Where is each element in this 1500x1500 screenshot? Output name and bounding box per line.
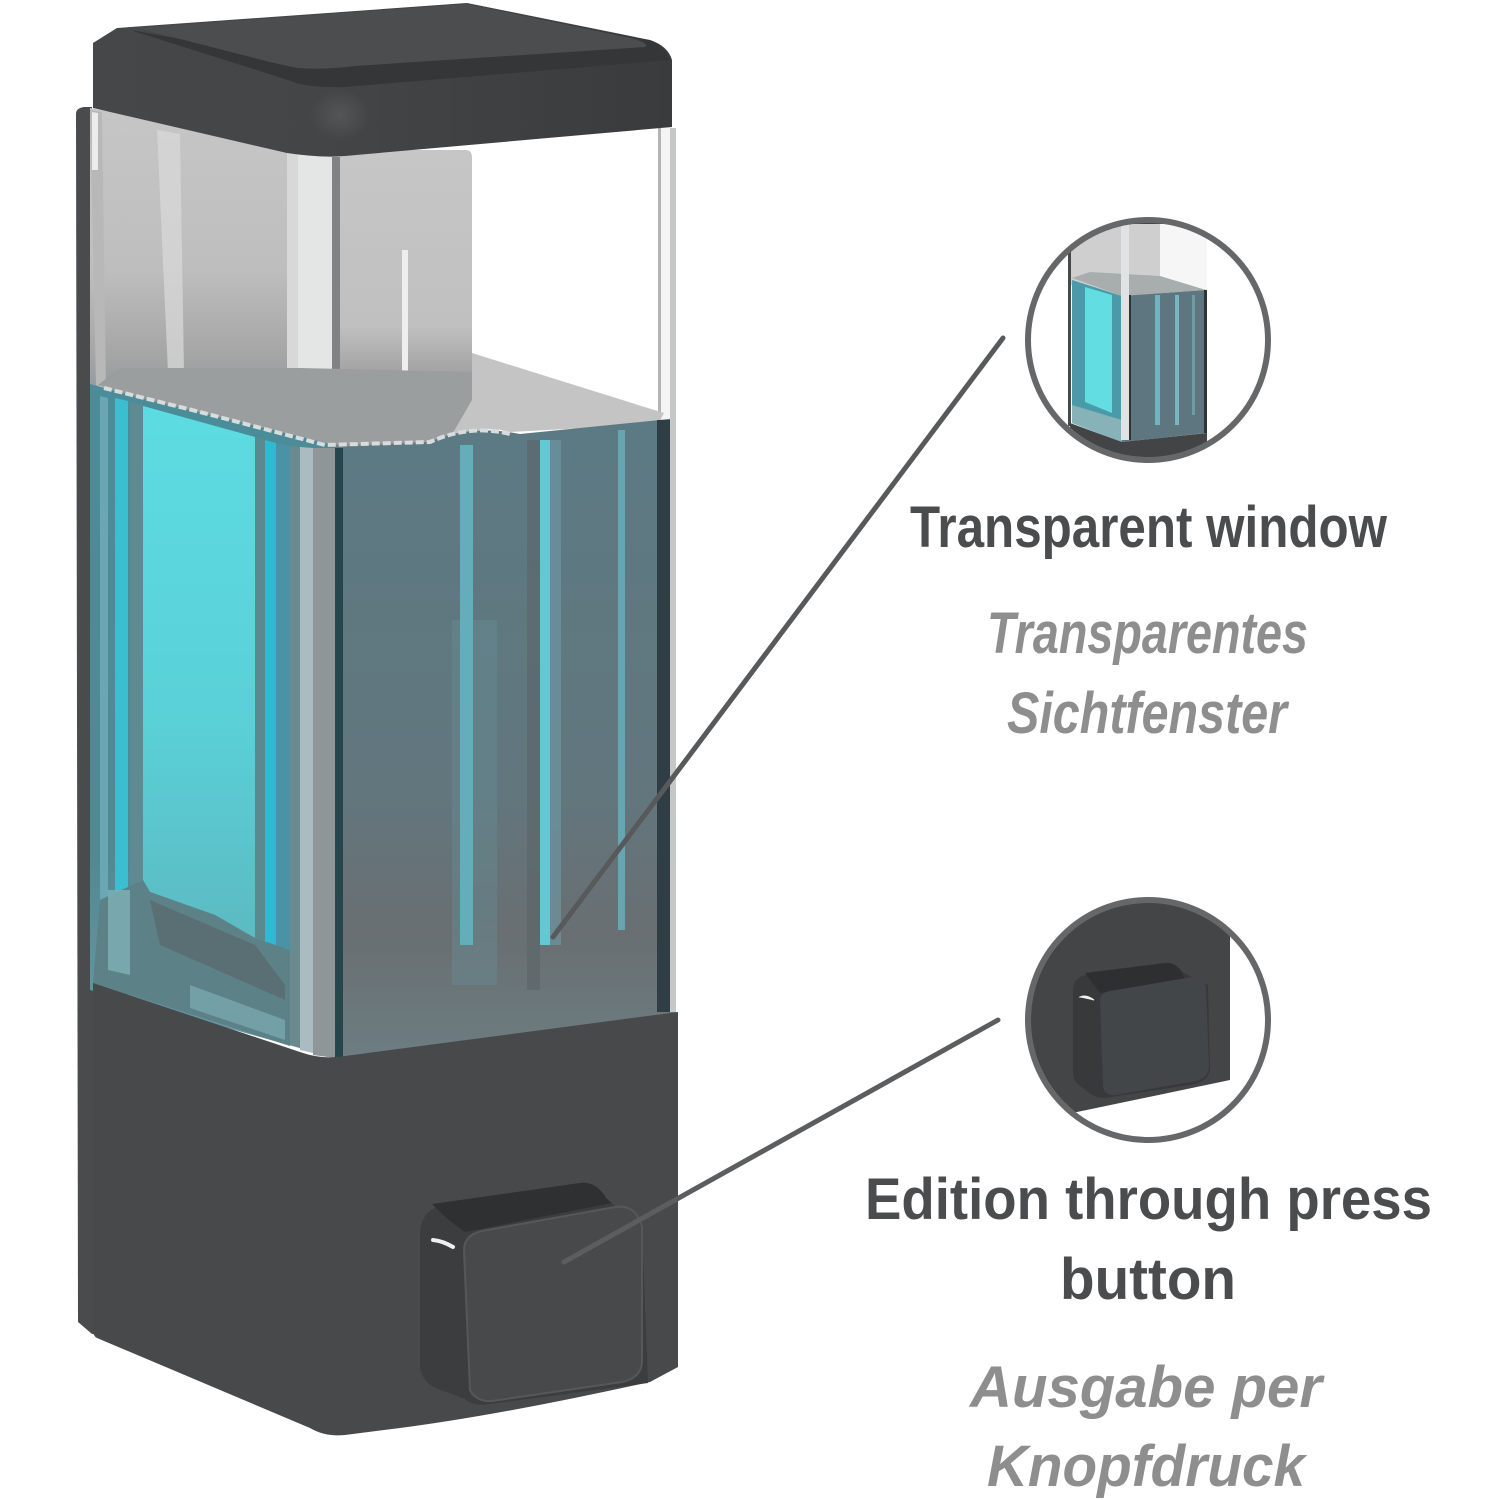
heading: Edition through press: Edition through press bbox=[865, 1167, 1432, 1232]
window: empty upper glass bbox=[90, 106, 674, 470]
liquid: left face bbox=[90, 384, 343, 1060]
body: lower housing bbox=[93, 983, 678, 1435]
refraction streaks bbox=[93, 128, 676, 1058]
heading: button: button bbox=[1060, 1247, 1236, 1312]
button bbox=[420, 1183, 648, 1405]
subheading: Ausgabe per: Ausgabe per bbox=[968, 1355, 1325, 1420]
callout circle: transparent window bbox=[1028, 212, 1268, 470]
cap: corner highlight bbox=[310, 89, 370, 141]
subheading: Sichtfenster: Sichtfenster bbox=[1007, 681, 1290, 746]
heading: transparent window: Transparent window bbox=[910, 495, 1388, 560]
button: highlight bbox=[433, 1240, 453, 1247]
leader line: transparent window bbox=[553, 338, 1003, 937]
subheading: Transparentes: Transparentes bbox=[987, 601, 1308, 666]
button: front face bbox=[464, 1207, 642, 1401]
teal insert bbox=[143, 406, 255, 938]
subheading: Knopfdruck: Knopfdruck bbox=[987, 1434, 1308, 1499]
product: soap dispenser bbox=[76, 3, 678, 1435]
liquid: foam line bbox=[104, 388, 510, 445]
cap: bevel shadow bbox=[130, 30, 670, 87]
liquid: surface bbox=[98, 353, 664, 445]
cap: side faces bbox=[93, 3, 672, 157]
cap bbox=[93, 3, 672, 157]
liquid: right face bbox=[335, 418, 676, 1060]
callout circle: press button bbox=[1020, 890, 1268, 1140]
wall back plate bbox=[76, 107, 98, 1334]
cap: top face bbox=[137, 4, 646, 69]
leader line: press button bbox=[564, 1020, 998, 1262]
button: recess and side shell bbox=[420, 1183, 648, 1405]
